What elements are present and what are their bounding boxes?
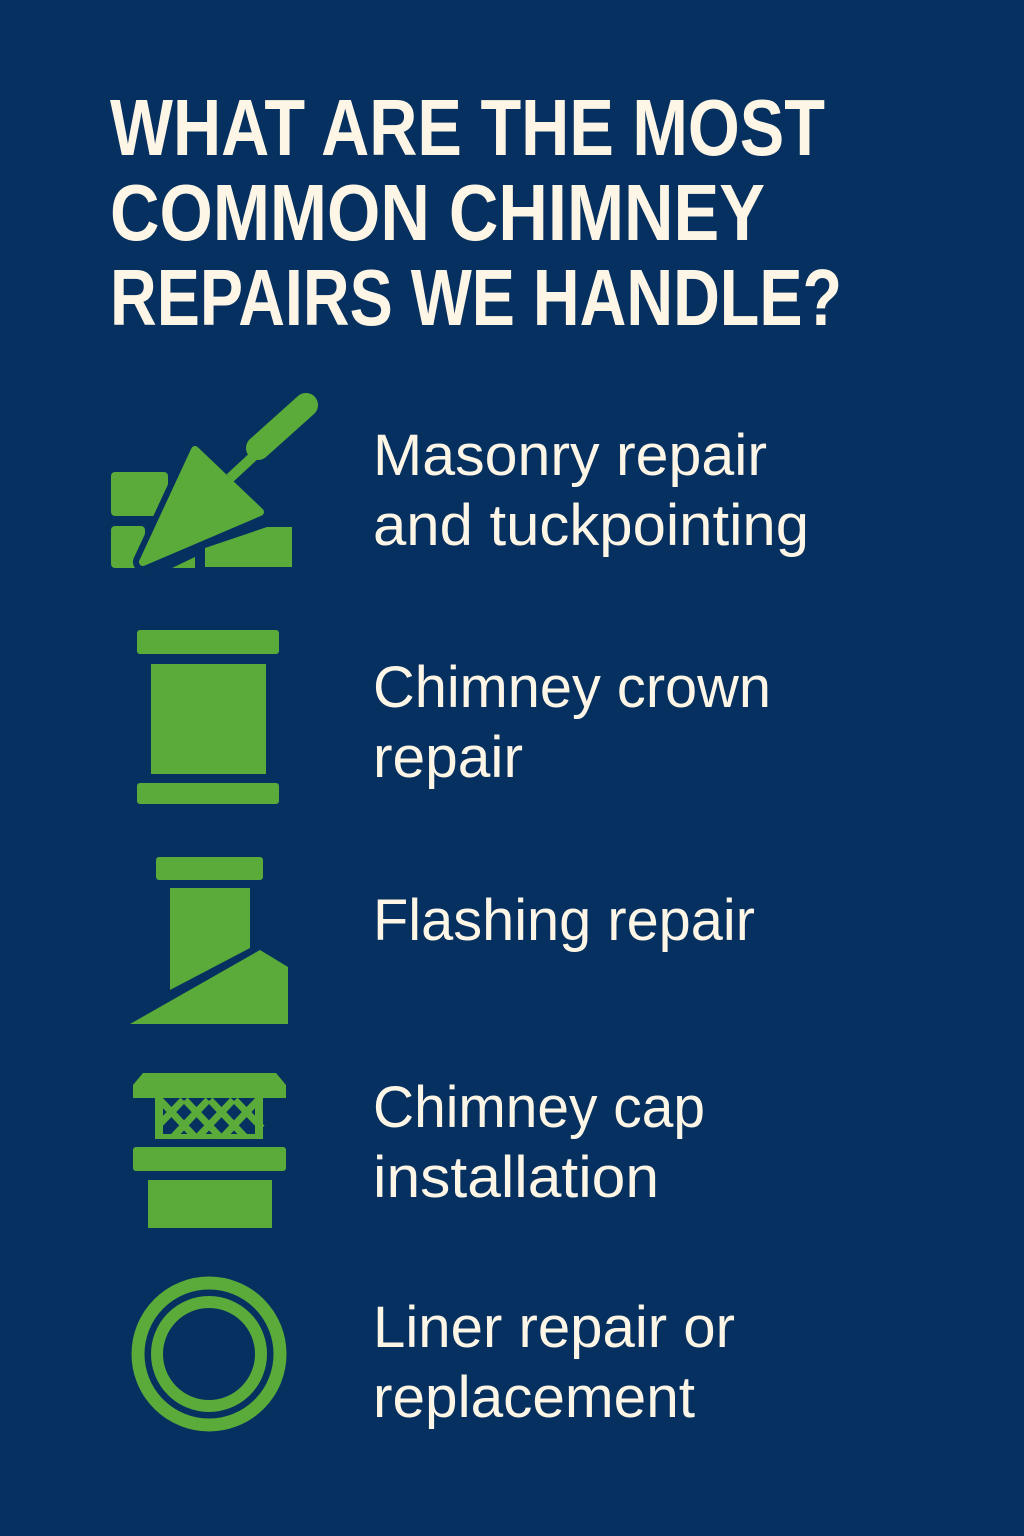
text: liner: replacement [373,1365,695,1430]
text: cap [373,1075,705,1210]
text: flashing: Flashing repair [373,888,755,953]
item 1: masonry [111,405,809,568]
icon: chimney cap [133,1073,286,1228]
text: masonry: Masonry repair [373,423,767,488]
text: cap: Chimney cap [373,1075,705,1140]
item 2: crown [137,630,771,804]
title: WHAT ARE THE MOST [110,83,825,172]
text: crown [373,655,771,790]
text: liner [373,1295,735,1430]
text: liner: Liner repair or [373,1295,735,1360]
icon: chimney crown [137,630,279,804]
title: REPAIRS WE HANDLE? [110,253,842,342]
title: COMMON CHIMNEY [110,168,765,257]
text: masonry: and tuckpointing [373,493,809,558]
title [110,83,842,342]
text: cap: installation [373,1145,659,1210]
icon: trowel and bricks [111,405,306,568]
icon: flashing [130,857,288,1024]
text: masonry [373,423,809,558]
item 3: flashing [130,857,755,1024]
icon: liner rings [138,1283,280,1425]
item 5: liner [138,1283,735,1430]
item 4: cap [133,1073,705,1228]
text: crown: Chimney crown [373,655,771,720]
text: crown: repair [373,725,523,790]
